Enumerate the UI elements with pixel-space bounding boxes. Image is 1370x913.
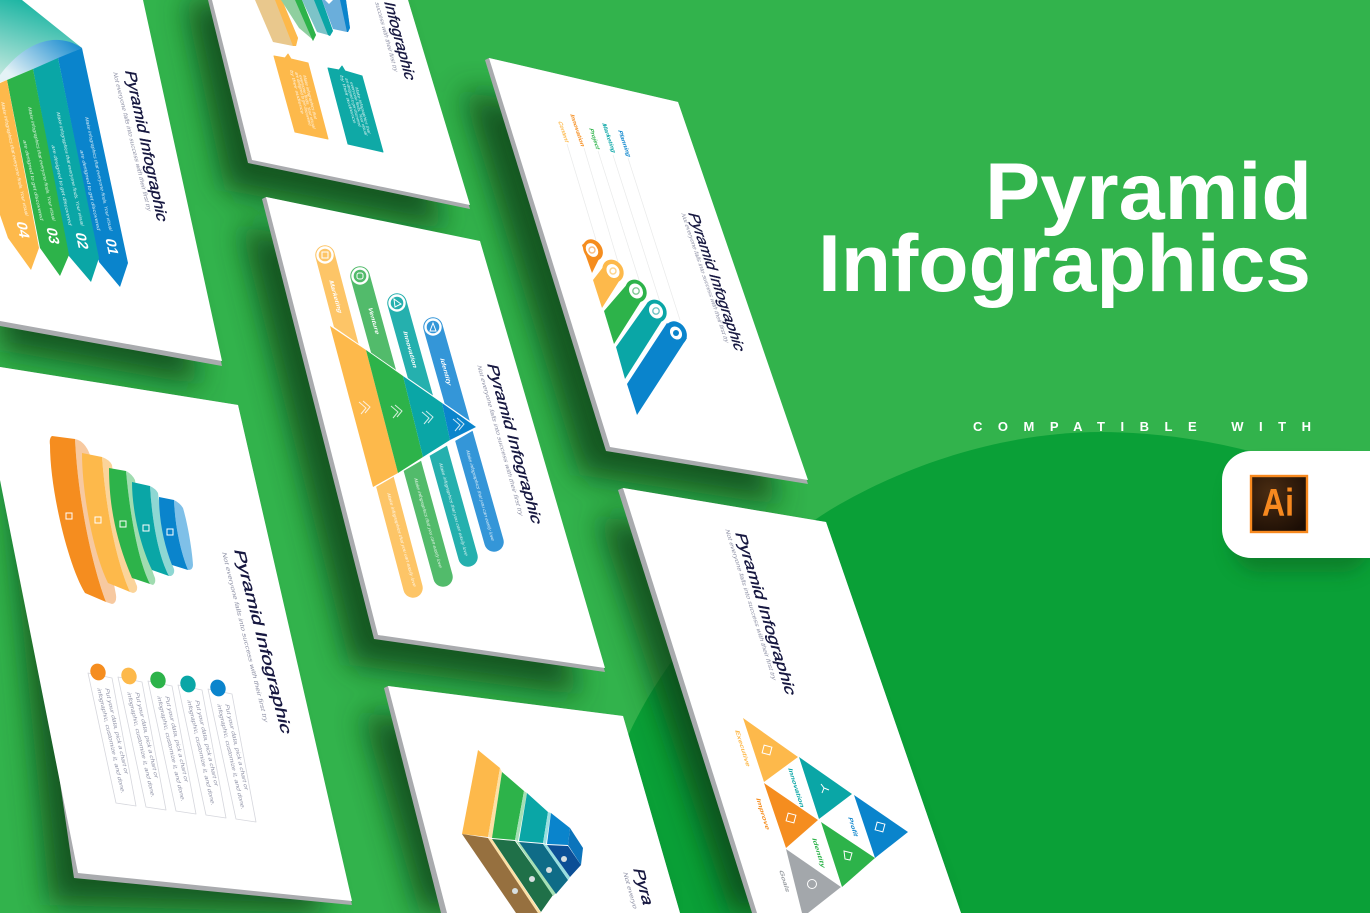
label leader lines — [567, 144, 680, 320]
base dots — [512, 856, 567, 894]
yellow card caption: Make infographics that — [302, 75, 318, 120]
ribbon captions: are designed to get discovered — [78, 150, 101, 231]
slide subtitle: Not everyone falls into success with their first try — [475, 365, 524, 517]
triangle icons — [762, 745, 885, 888]
bar captions: Make infographics that you can easily love — [412, 478, 443, 569]
ribbon numbers: 02 — [71, 231, 92, 250]
bar labels: Identity — [438, 358, 453, 386]
bar labels: Venture — [366, 307, 381, 335]
ribbon numbers: 04 — [12, 220, 33, 240]
slide: stepped cylinders (top right) — [485, 58, 808, 484]
card captions: Put your data, pick a chart or — [193, 700, 219, 786]
pyramid blue arc face — [0, 40, 82, 82]
teal triangle — [799, 757, 852, 819]
bar labels — [327, 280, 453, 386]
bar labels: Innovation — [401, 331, 418, 369]
card captions: infographic, customize it, and done. — [215, 704, 245, 810]
column labels: Content — [556, 121, 570, 144]
slide subtitle: Not everyone falls into success with their first try — [679, 213, 730, 344]
bar captions: Make infographics that you can easily love — [437, 463, 469, 556]
card shadow — [1232, 468, 1370, 572]
triangle outline — [330, 326, 476, 487]
yellow card caption: by their audience — [289, 70, 305, 115]
ribbon captions: Make infographics that everyone finds. Your visual — [26, 107, 56, 221]
card captions: Put your data, pick a chart or — [103, 688, 129, 774]
orange cylinder — [579, 235, 607, 273]
dark teal base face — [519, 842, 568, 894]
slide subtitle: Not everyone falls into success with their first try — [723, 529, 778, 681]
triangle green segment — [366, 350, 423, 473]
yellow card caption: are designed to get discovered — [294, 72, 313, 126]
card captions: infographic, customize it, and done. — [95, 688, 125, 794]
slide title: Pyramid Infographic — [684, 211, 748, 353]
column labels: Planning — [616, 130, 632, 158]
card captions: Put your data, pick a chart or — [133, 692, 159, 778]
ribbon numbers: 01 — [101, 237, 122, 256]
ribbon 03 green — [7, 69, 69, 276]
triangle teal segment — [403, 376, 450, 457]
bar captions: Make infographics that you can easily love — [385, 493, 417, 587]
teal cylinder — [616, 295, 671, 379]
slide: stepped ribbons (top left) — [0, 0, 222, 366]
card captions: infographic, customize it, and done. — [185, 700, 215, 806]
triangle labels: Identity — [810, 838, 826, 869]
blue side face — [568, 828, 583, 865]
triangle labels — [733, 730, 859, 893]
card captions — [95, 688, 249, 810]
card captions: Put your data, pick a chart or — [163, 696, 189, 782]
ribbon 01 blue — [58, 48, 128, 287]
teal card caption: everyone finds. Your visual — [349, 82, 369, 136]
slide subtitle: Not everyo — [621, 872, 638, 910]
slide title: Pyra — [629, 867, 656, 906]
yellow text card — [274, 54, 328, 139]
green triangle — [821, 822, 875, 887]
chevrons — [359, 401, 464, 431]
triangle labels: Goals — [777, 870, 791, 893]
colored dots — [88, 661, 228, 699]
layer icons — [66, 513, 173, 535]
green layer — [109, 468, 155, 585]
blue layer — [159, 497, 193, 570]
slide drop shadows — [0, 0, 935, 913]
ribbon captions: are designed to get discovered — [50, 145, 73, 226]
teal card caption: by their audience — [339, 75, 358, 125]
yellow triangle — [743, 718, 798, 782]
slide: triangle grid (bottom right) — [618, 488, 961, 913]
grey triangle — [786, 849, 841, 913]
bar captions: Make infographics that you can easily love — [464, 450, 495, 542]
teal layer — [132, 482, 174, 576]
main title: Pyramid — [985, 147, 1312, 237]
ribbon 02 teal — [33, 58, 99, 282]
column labels: Marketing — [600, 123, 617, 153]
slide title: Infographic — [380, 0, 418, 82]
slide title: Pyramid Infographic — [731, 531, 799, 696]
ribbon numbers: 03 — [42, 226, 63, 245]
blue triangle — [854, 795, 908, 858]
dark blue base face — [547, 845, 581, 877]
triangle blue segment — [442, 403, 476, 440]
dark green base face — [492, 839, 553, 912]
triangle labels: Executive — [733, 730, 751, 768]
pyramid top face — [0, 0, 82, 82]
white compatibility card — [1222, 451, 1370, 558]
yellow card caption — [289, 70, 318, 129]
slide: arrow pyramid over bars (centre) — [262, 197, 605, 672]
pale yellow strip — [488, 768, 502, 838]
background: dark green curved panel — [622, 432, 1370, 913]
teal front face — [519, 793, 548, 843]
card captions: Put your data, pick a chart or — [223, 704, 249, 790]
slide: layered cards (top centre) — [208, 0, 470, 209]
pale yellow base strip — [488, 838, 541, 913]
bars — [325, 255, 494, 588]
slide title: Pyramid Infographic — [230, 548, 294, 735]
slide: curved stepped pyramid (bottom left) — [0, 367, 352, 905]
blue front face — [547, 813, 570, 845]
pale green strip — [515, 791, 527, 841]
bar icon rings — [318, 248, 440, 334]
compatible with label: COMPATIBLE WITH — [973, 419, 1311, 434]
card captions: infographic, customize it, and done. — [155, 696, 185, 802]
slide title: Pyramid Infographic — [121, 69, 170, 223]
column labels: Project — [587, 128, 601, 151]
ribbon captions — [0, 102, 113, 231]
icon: Adobe Illustrator: Ai — [1262, 482, 1294, 525]
slide subtitle: Not everyone falls into success with their first try — [111, 72, 152, 212]
triangle labels: Improve — [754, 798, 771, 831]
triangle labels: Innovation — [786, 768, 805, 808]
orange layer — [50, 436, 116, 604]
green front face — [492, 772, 524, 840]
brown base face — [462, 834, 538, 913]
bar captions — [385, 450, 495, 587]
orange triangle — [764, 783, 818, 848]
teal text card — [328, 66, 383, 152]
triangle labels: Profit — [846, 817, 859, 838]
ribbon captions: are designed to get discovered — [21, 140, 44, 221]
teal card caption: Make infographics that — [354, 87, 372, 135]
pale teal strip — [543, 812, 551, 844]
teal card caption — [339, 75, 372, 136]
triangle yellow segment — [330, 326, 398, 487]
yellow layer — [82, 453, 137, 593]
column labels — [556, 114, 632, 158]
bar labels: Marketing — [327, 280, 343, 314]
icon: Adobe Illustrator — [1251, 476, 1307, 532]
ribbon numbers — [12, 220, 122, 256]
blue cylinder — [627, 317, 691, 415]
light green base strip — [516, 841, 556, 896]
main title — [818, 147, 1312, 309]
column labels: Innovation — [568, 114, 586, 147]
yellow front face — [462, 750, 500, 837]
light teal base strip — [543, 844, 570, 880]
outlined text cards — [88, 673, 256, 822]
yellow card caption: everyone finds. Your visual — [298, 75, 317, 129]
slide subtitle: Not everyone falls into success with their first try — [220, 552, 269, 724]
card captions: infographic, customize it, and done. — [125, 692, 155, 798]
slide title: Pyramid Infographic — [483, 362, 545, 526]
slide: 3D pyramid (bottom centre) — [384, 686, 680, 913]
layered pyramid stack — [255, 0, 350, 46]
yellow cylinder — [593, 255, 628, 308]
ribbon 04 yellow — [0, 80, 39, 270]
ribbon captions: Make infographics that everyone finds. Your visual — [83, 117, 113, 231]
main title: Infographics — [818, 219, 1311, 309]
green cylinder — [604, 275, 651, 344]
slide subtitle: success with their first try — [373, 2, 399, 73]
ribbon captions: Make infographics that everyone finds. Your visual — [55, 112, 85, 226]
teal card caption: are designed to get discovered — [344, 78, 363, 127]
